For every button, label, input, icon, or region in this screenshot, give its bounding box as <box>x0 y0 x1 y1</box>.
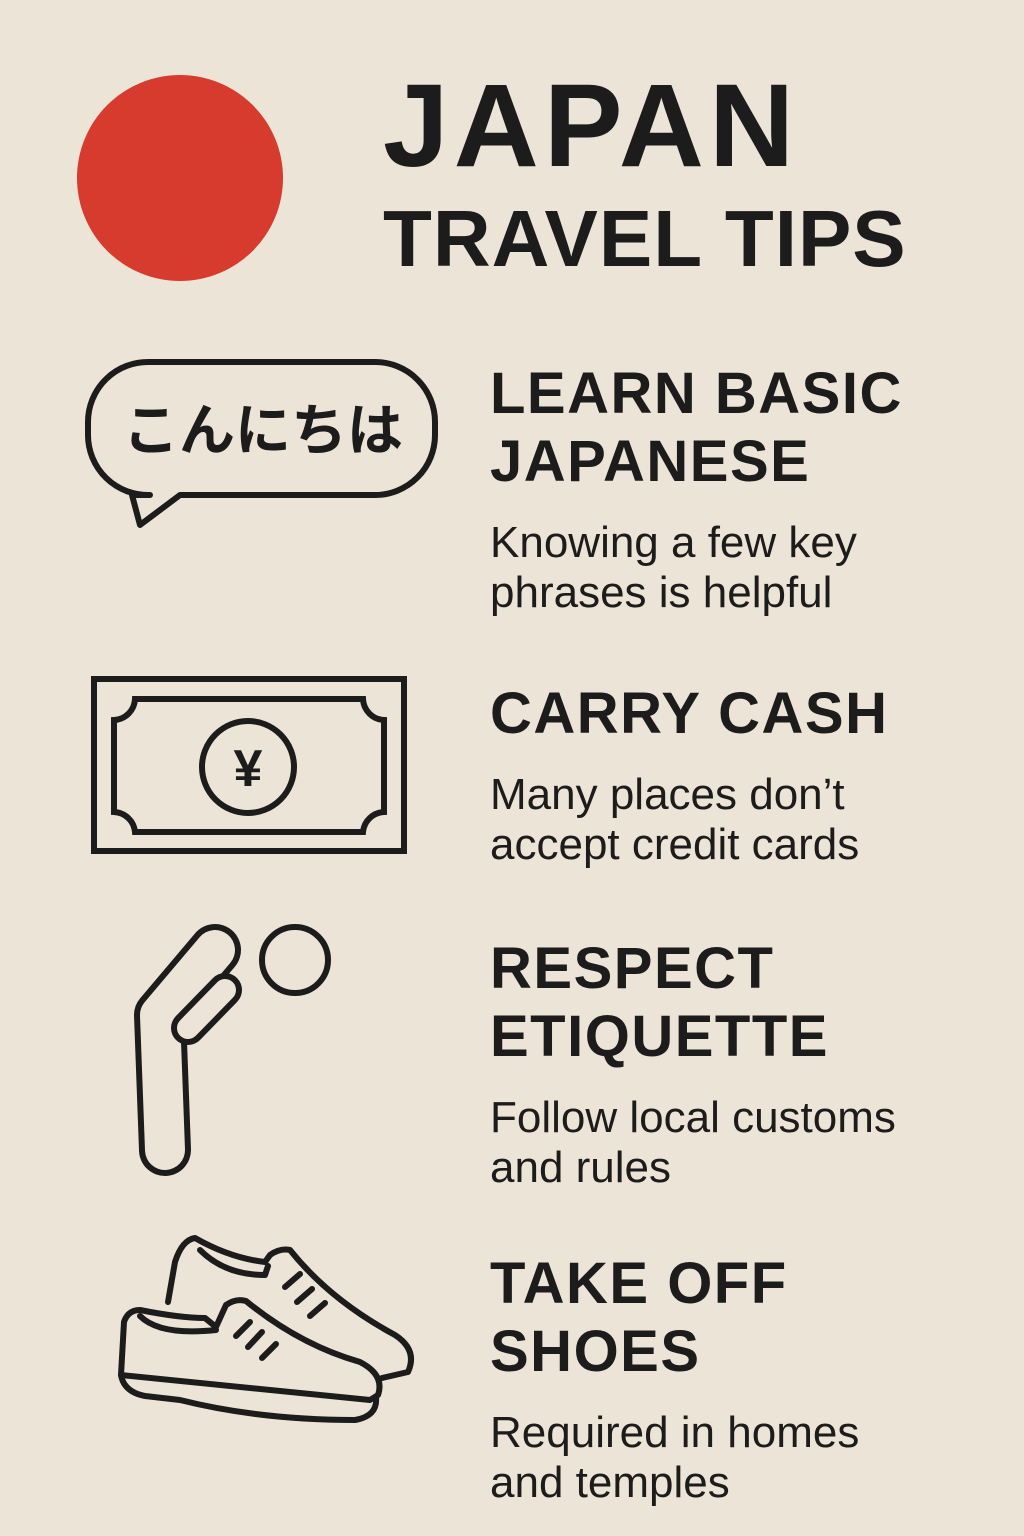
section 4 text: Required in homes <box>490 1408 859 1457</box>
section 4 text <box>490 1251 859 1507</box>
title: JAPAN <box>383 60 799 192</box>
icon: yen banknote <box>91 676 407 854</box>
section 4 text: TAKE OFF <box>490 1251 788 1316</box>
section 1 text: phrases is helpful <box>490 568 832 617</box>
icon: yen banknote: ¥ <box>234 740 263 798</box>
icon: speech bubble <box>85 359 438 528</box>
section 4 text: SHOES <box>490 1319 701 1384</box>
section 1 text: Knowing a few key <box>490 518 857 567</box>
section 3 text: Follow local customs <box>490 1093 896 1142</box>
section 3 text <box>490 936 896 1192</box>
icon: speech bubble: こんにちは <box>123 386 403 467</box>
section 1 text: LEARN BASIC <box>490 361 903 426</box>
section 2 text: accept credit cards <box>490 820 859 869</box>
title <box>383 60 907 283</box>
section 2 text: CARRY CASH <box>490 681 888 746</box>
section 1 text: JAPANESE <box>490 429 810 494</box>
section 1 text <box>490 361 903 617</box>
icon: shoes <box>118 1235 414 1423</box>
section 3 text: and rules <box>490 1143 671 1192</box>
red sun circle <box>77 75 283 281</box>
section 2 text: Many places don’t <box>490 770 845 819</box>
section 4 text: and temples <box>490 1458 730 1507</box>
section 3 text: RESPECT <box>490 936 774 1001</box>
title: TRAVEL TIPS <box>383 194 907 283</box>
icon: bowing person <box>134 924 331 1176</box>
section 3 text: ETIQUETTE <box>490 1004 829 1069</box>
section 2 text <box>490 681 888 869</box>
